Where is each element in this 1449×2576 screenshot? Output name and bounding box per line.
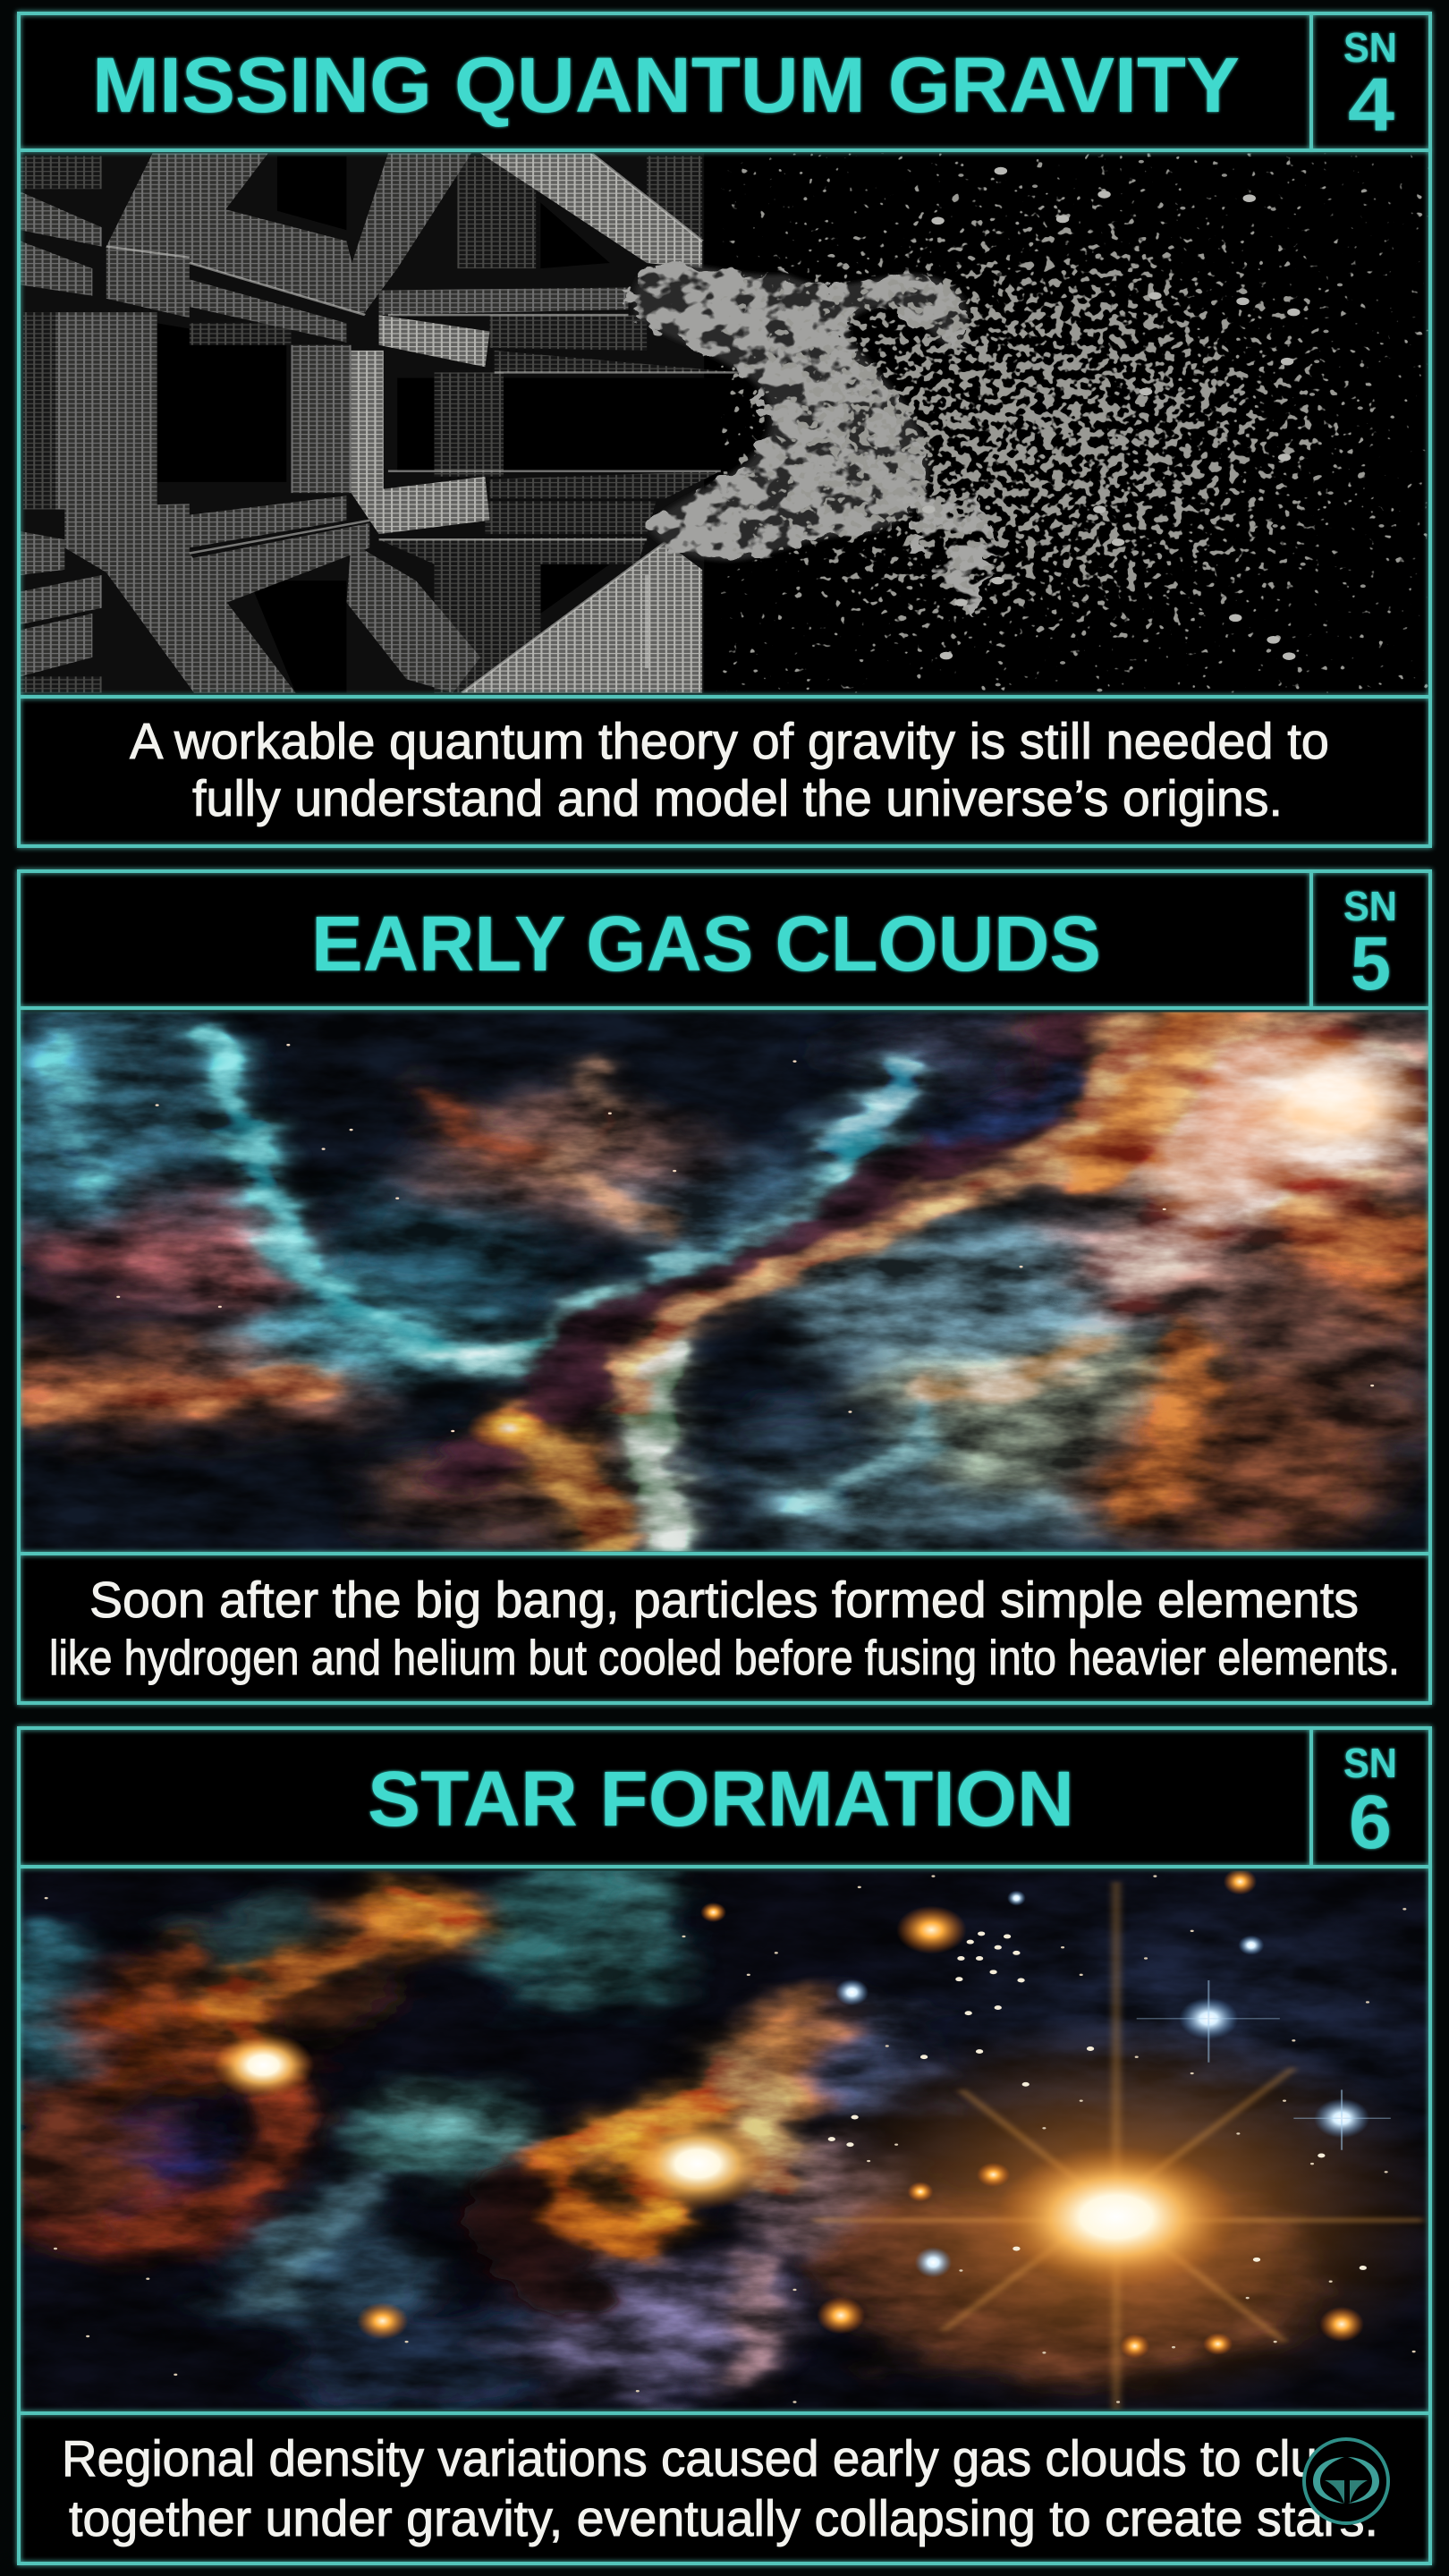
main star — [775, 1882, 1449, 2419]
section number: SN — [1343, 24, 1397, 71]
panel: star formation — [0, 1728, 1449, 2563]
panel: early gas clouds — [0, 871, 1449, 1703]
logo badge — [1304, 2439, 1388, 2523]
particle cloud — [721, 153, 1432, 693]
title: EARLY GAS CLOUDS — [311, 901, 1101, 987]
image: lattice structure dissolving into particles — [21, 153, 1432, 693]
section number — [1343, 883, 1397, 1005]
caption: Soon after the big bang, particles formed simple elements — [89, 1572, 1359, 1629]
larger debris — [928, 171, 1293, 657]
frame lines — [19, 13, 1430, 846]
section number: 5 — [1351, 921, 1391, 1005]
section number — [1343, 24, 1397, 147]
caption: together under gravity, eventually collapsing to create stars. — [69, 2490, 1378, 2547]
section number: 6 — [1349, 1780, 1392, 1864]
section number: SN — [1343, 1740, 1397, 1786]
frame lines — [19, 871, 1430, 1703]
image: nebula gas clouds — [0, 979, 1449, 1555]
panel: missing quantum gravity — [19, 13, 1432, 846]
bright protostars — [213, 1868, 1364, 2359]
section number: SN — [1343, 883, 1397, 929]
section number: 4 — [1348, 63, 1394, 147]
caption — [49, 1572, 1400, 1685]
title: STAR FORMATION — [368, 1756, 1074, 1843]
star cluster and field stars — [832, 1934, 1363, 2267]
frame lines — [19, 1728, 1430, 2563]
cloud texture — [21, 1012, 1430, 1552]
caption: Regional density variations caused early gas clouds to clump — [62, 2430, 1385, 2487]
caption: fully understand and model the universe’s origins. — [192, 770, 1283, 827]
caption: A workable quantum theory of gravity is still needed to — [130, 713, 1329, 770]
cloud texture — [21, 1870, 908, 2411]
stars — [118, 1045, 1372, 1431]
section number — [1343, 1740, 1397, 1864]
title: MISSING QUANTUM GRAVITY — [92, 42, 1240, 129]
caption — [130, 713, 1329, 827]
filaments — [28, 1018, 1404, 1552]
blue stars — [835, 1891, 1391, 2277]
filaments — [139, 1882, 769, 2375]
image: star-forming nebula — [0, 1838, 1449, 2419]
caption — [62, 2430, 1385, 2547]
foam transition — [634, 266, 968, 561]
